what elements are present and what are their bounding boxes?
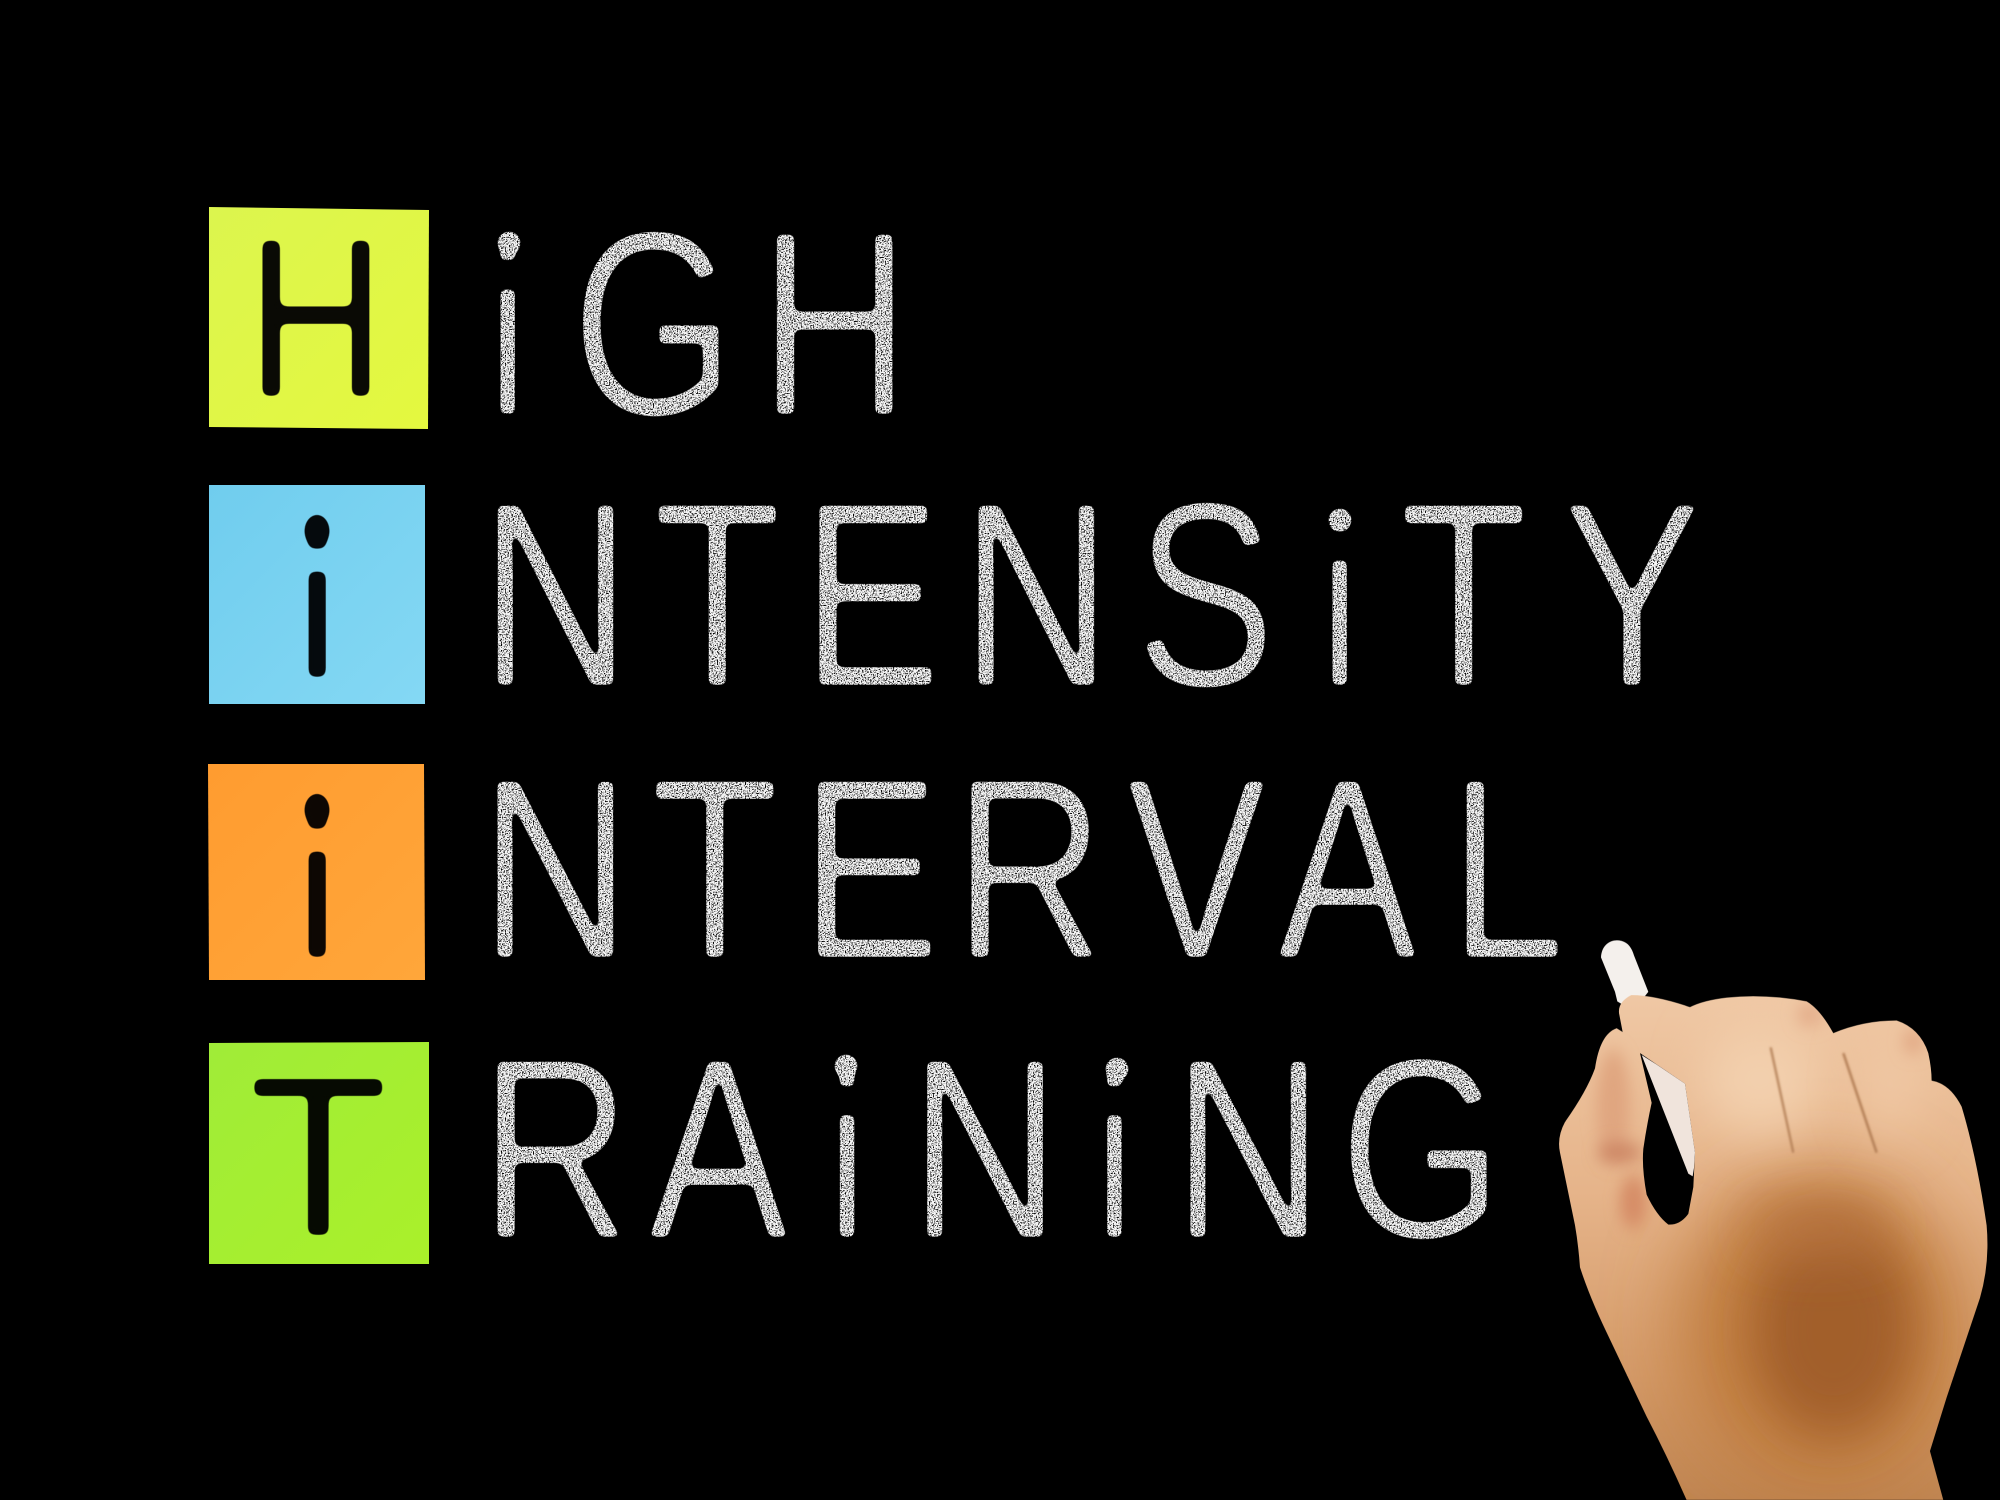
chalk stick lower part xyxy=(1642,1055,1695,1176)
sticky note: I (blue): i xyxy=(295,497,339,720)
sticky note: H: H xyxy=(247,192,385,444)
chalk lettering: word list xyxy=(479,176,1702,1293)
sticky note: I (blue) xyxy=(209,485,425,720)
hand silhouette xyxy=(1550,984,2000,1500)
gap between thumb and fingers xyxy=(1640,1053,1695,1225)
sticky note: I (orange) xyxy=(208,764,425,1000)
sticky note: H xyxy=(209,192,429,444)
sticky note: T: T xyxy=(249,1031,388,1284)
sticky note: I (orange): i xyxy=(295,777,339,1000)
chalk word: Interval: NTERVAL xyxy=(479,724,1566,1013)
chalk word: Training: RAiNiNG xyxy=(479,1004,1504,1293)
sticky note: T xyxy=(209,1031,429,1284)
chalk word: Intensity: NTENSiTY xyxy=(479,447,1702,742)
illustration: hand holding chalk xyxy=(1550,940,2000,1500)
chalk i dots xyxy=(496,230,1353,1082)
infographic: HIIT chalkboard xyxy=(208,207,1988,1500)
chalk stick upper part xyxy=(1601,940,1648,1011)
chalk word: High: iGH xyxy=(486,176,911,471)
